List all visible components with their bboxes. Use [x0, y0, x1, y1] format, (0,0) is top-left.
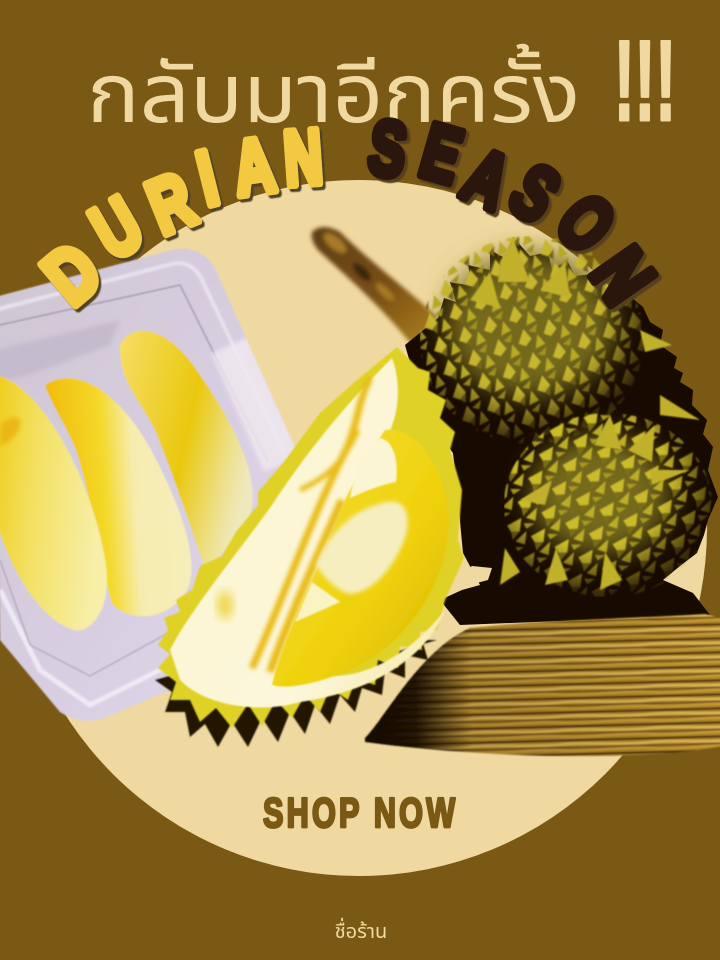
letter E: E	[411, 108, 471, 201]
yellow fruit	[272, 430, 448, 687]
call to action: SHOP NOW: SHOP NOW	[263, 789, 456, 836]
durian top glow	[445, 253, 615, 397]
fruit pale wedge	[295, 582, 340, 622]
photo: whole durians, stem and basket	[312, 227, 720, 756]
photo: plastic tray with durian pieces	[0, 249, 301, 721]
letter S: S	[495, 148, 574, 240]
tray body	[0, 249, 297, 721]
letter N: N	[281, 114, 325, 203]
fruit pale center	[316, 502, 408, 594]
letter I: I	[190, 135, 226, 222]
shop name: ชื่อร้าน	[335, 917, 387, 943]
cream circle	[11, 180, 707, 876]
curved heading: SEASON	[364, 104, 672, 319]
letter A: A	[451, 132, 522, 227]
letter A: A	[228, 122, 280, 213]
cream gap	[458, 566, 492, 586]
letter N: N	[575, 232, 672, 319]
white flesh	[170, 358, 445, 707]
curved heading: DURIAN	[26, 114, 325, 321]
letter U: U	[77, 181, 156, 276]
title: Thai headline: กลับมาอีกครั้ง	[87, 44, 580, 140]
fibrous stripe	[252, 378, 370, 672]
fruit highlights	[350, 438, 397, 498]
letter R: R	[136, 156, 206, 252]
photo: open durian	[155, 347, 464, 747]
durian top spikes	[420, 236, 644, 444]
dark spiky mass	[405, 237, 718, 625]
pale yellow spot	[217, 591, 233, 619]
stem	[312, 227, 438, 345]
letter S: S	[364, 104, 412, 195]
spiky rind	[158, 347, 464, 728]
durian bottom spikes	[504, 413, 712, 597]
durian piece middle	[45, 378, 191, 616]
dark spike base	[155, 640, 437, 747]
letter O: O	[539, 178, 631, 270]
durian bottom glow	[530, 435, 670, 555]
orange fold	[0, 417, 20, 446]
letter D: D	[26, 225, 117, 321]
durian piece left	[0, 375, 107, 630]
durian large spikes	[470, 238, 700, 590]
durian piece right	[120, 331, 253, 572]
basket	[365, 614, 720, 756]
